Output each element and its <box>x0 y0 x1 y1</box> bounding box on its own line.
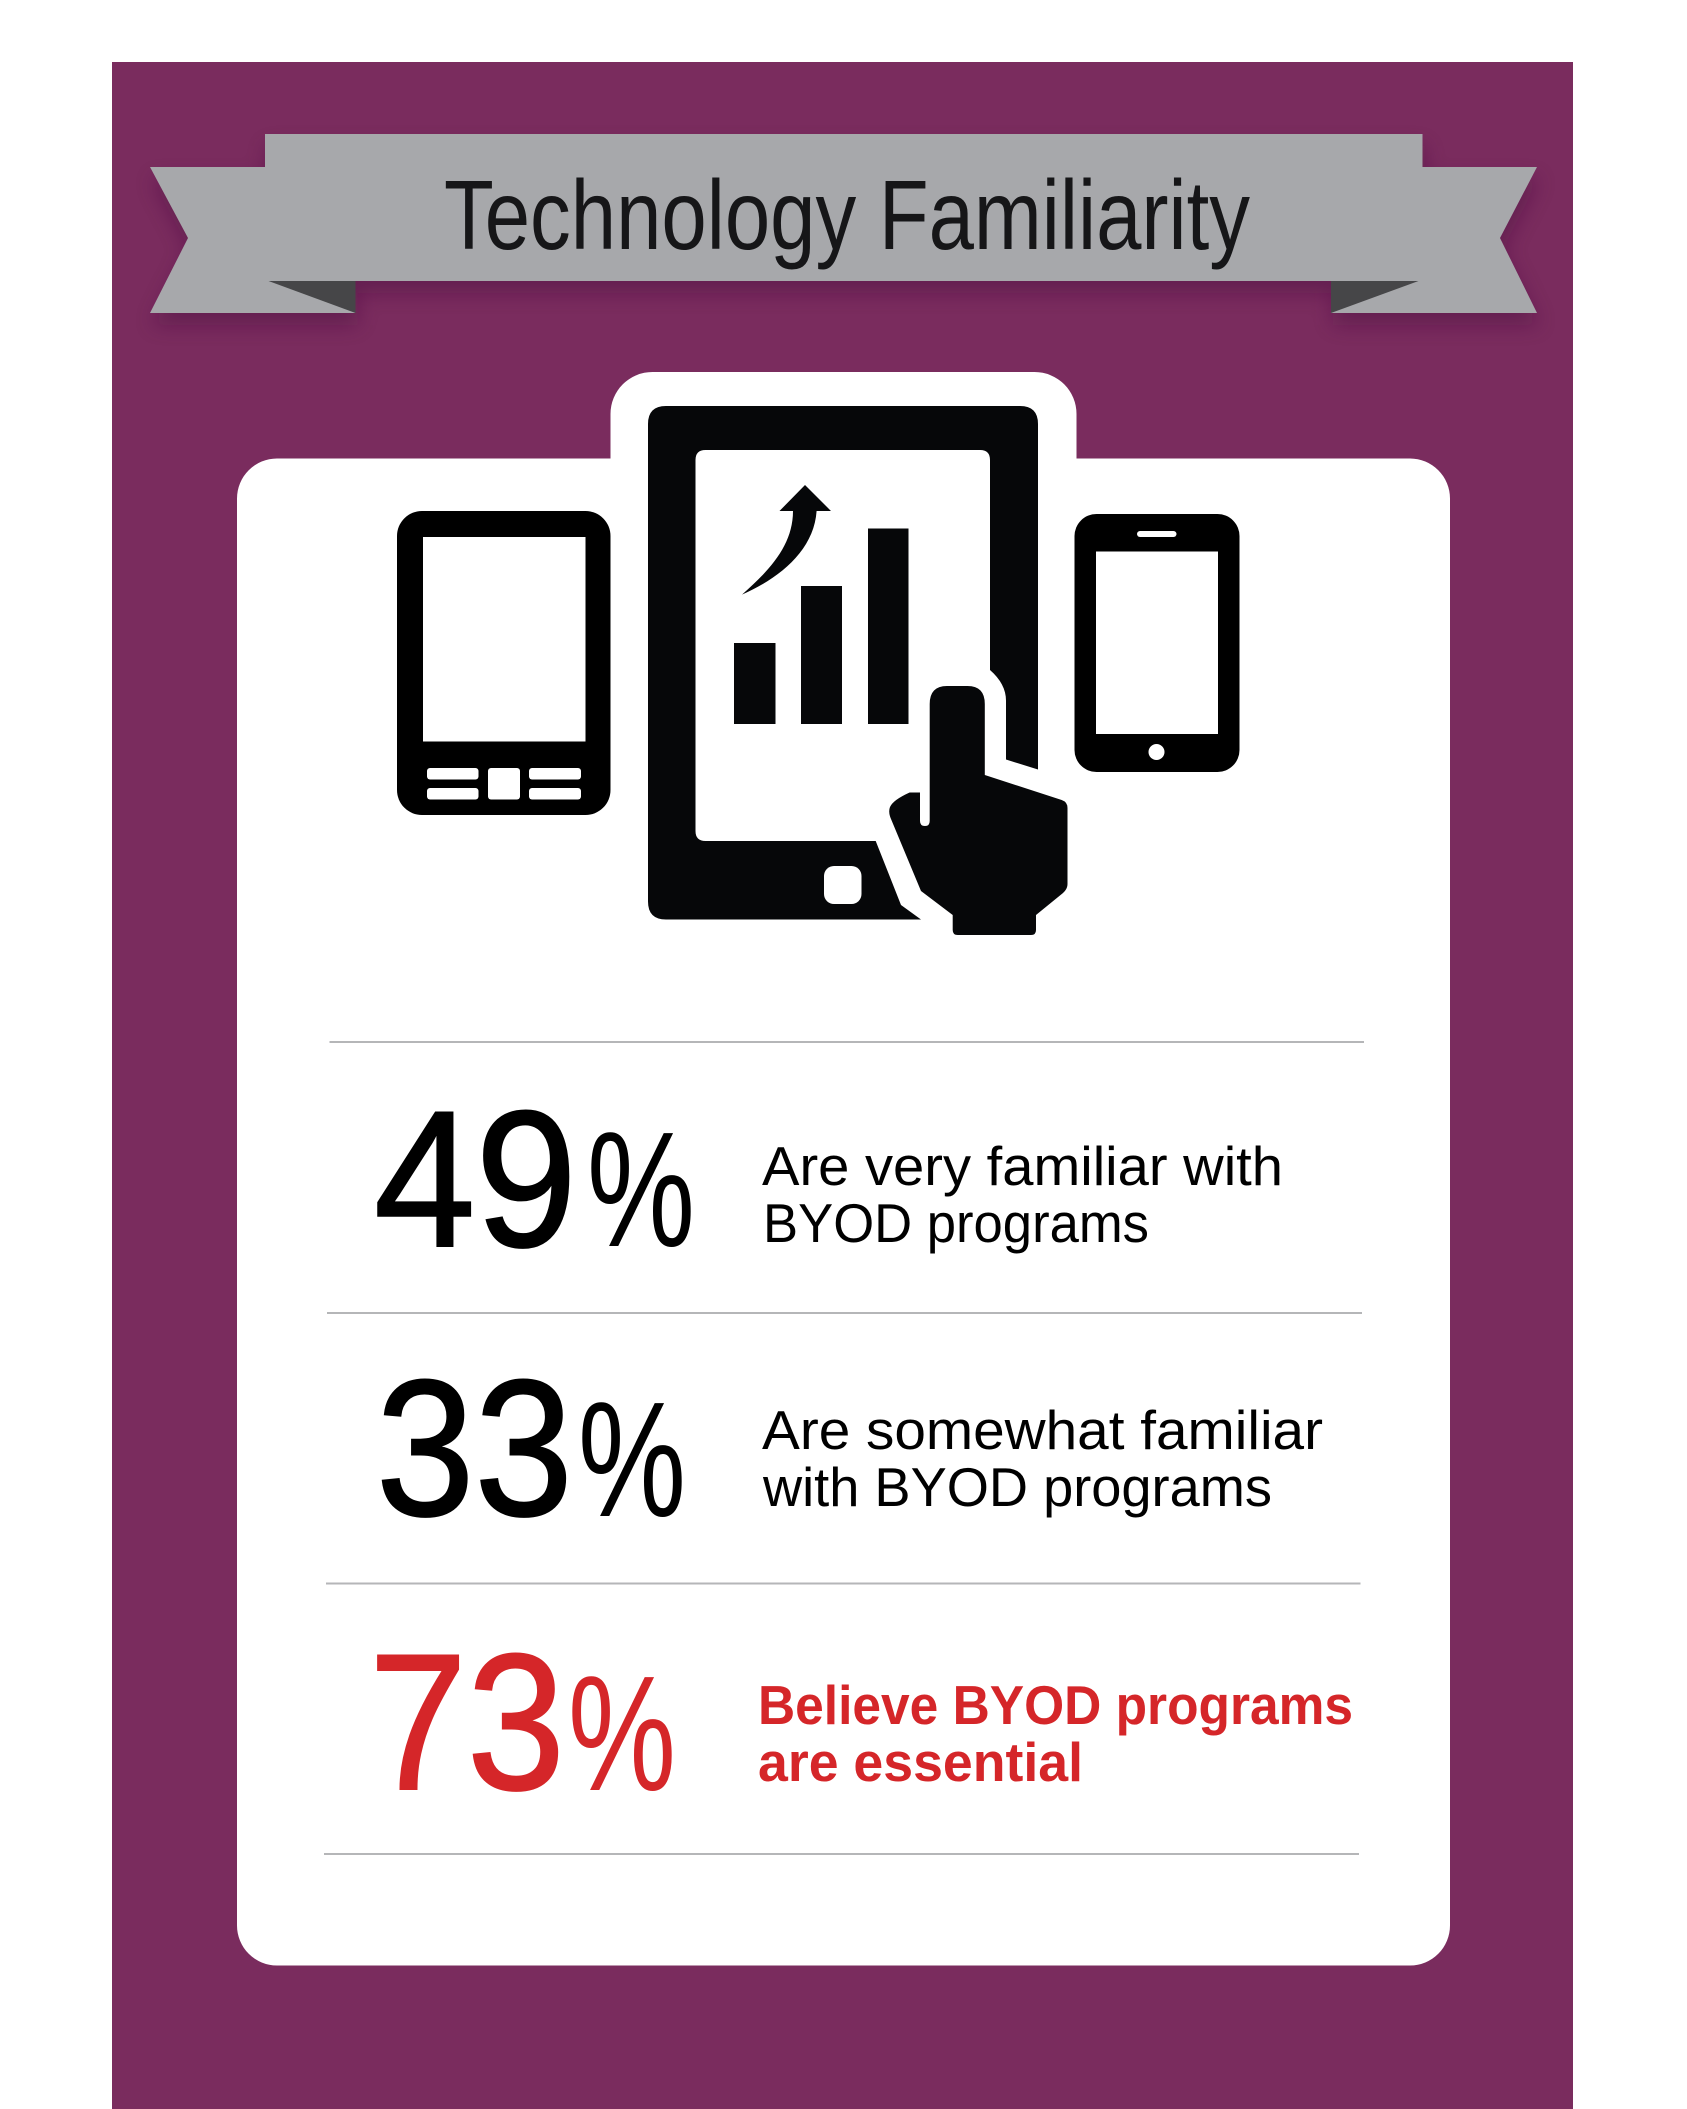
ribbon banner <box>150 134 1539 325</box>
title: Technology Familiarity <box>444 160 1250 270</box>
rising arrow <box>742 485 831 595</box>
statistic: 73%: 73 <box>369 1614 565 1831</box>
statistic: 73% <box>369 1614 1353 1831</box>
divider lines <box>324 1042 1364 1854</box>
statistic: 49%: % <box>587 1098 695 1281</box>
statistic: 49%: 49 <box>374 1071 577 1288</box>
bar chart <box>734 528 908 724</box>
statistic: 73%: are essential <box>758 1731 1083 1793</box>
icon: keypad phone <box>397 511 610 815</box>
icon: smartphone <box>1074 514 1240 772</box>
white card with tab <box>237 372 1450 1966</box>
ribbon shadow <box>152 146 1539 325</box>
icon: tablet with chart and hand <box>648 406 1068 935</box>
statistic: 49% <box>374 1071 1283 1288</box>
label: Are somewhat familiar <box>762 1399 1323 1461</box>
statistic: 73%: % <box>568 1642 676 1825</box>
tablet body <box>648 406 1038 920</box>
label: Are very familiar with <box>762 1135 1283 1197</box>
statistic: 33%: with BYOD programs <box>762 1456 1272 1518</box>
hand pointer <box>889 686 1068 935</box>
home button <box>824 866 862 904</box>
label: Believe BYOD programs <box>758 1674 1353 1736</box>
statistic: 49%: BYOD programs <box>763 1192 1149 1254</box>
statistic: 33% <box>376 1340 1323 1557</box>
ribbon fold left <box>268 281 356 313</box>
ribbon shape <box>150 134 1537 313</box>
ribbon fold right <box>1331 281 1418 313</box>
statistic: 33%: 33 <box>376 1340 573 1557</box>
statistic: 33%: % <box>578 1368 686 1551</box>
